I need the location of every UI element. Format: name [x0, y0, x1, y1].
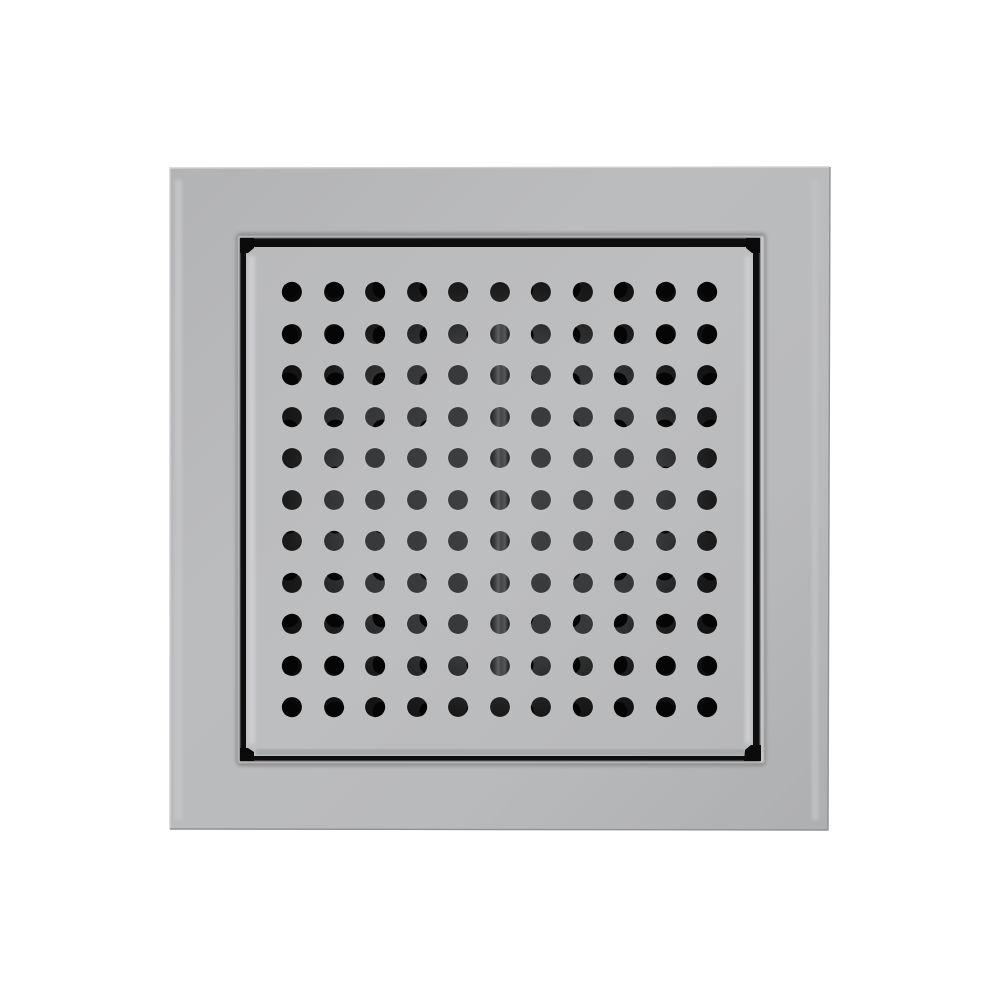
- illustration: square perforated drain cover: [169, 166, 831, 831]
- corner clips: [240, 238, 761, 761]
- perforation holes: [282, 282, 717, 717]
- outer frame: [170, 167, 830, 830]
- cover plate: [246, 247, 753, 756]
- recessed opening: [236, 233, 766, 766]
- centre column holes showing light strip behind: [490, 324, 510, 676]
- dark shapes seen through the holes: [282, 282, 718, 718]
